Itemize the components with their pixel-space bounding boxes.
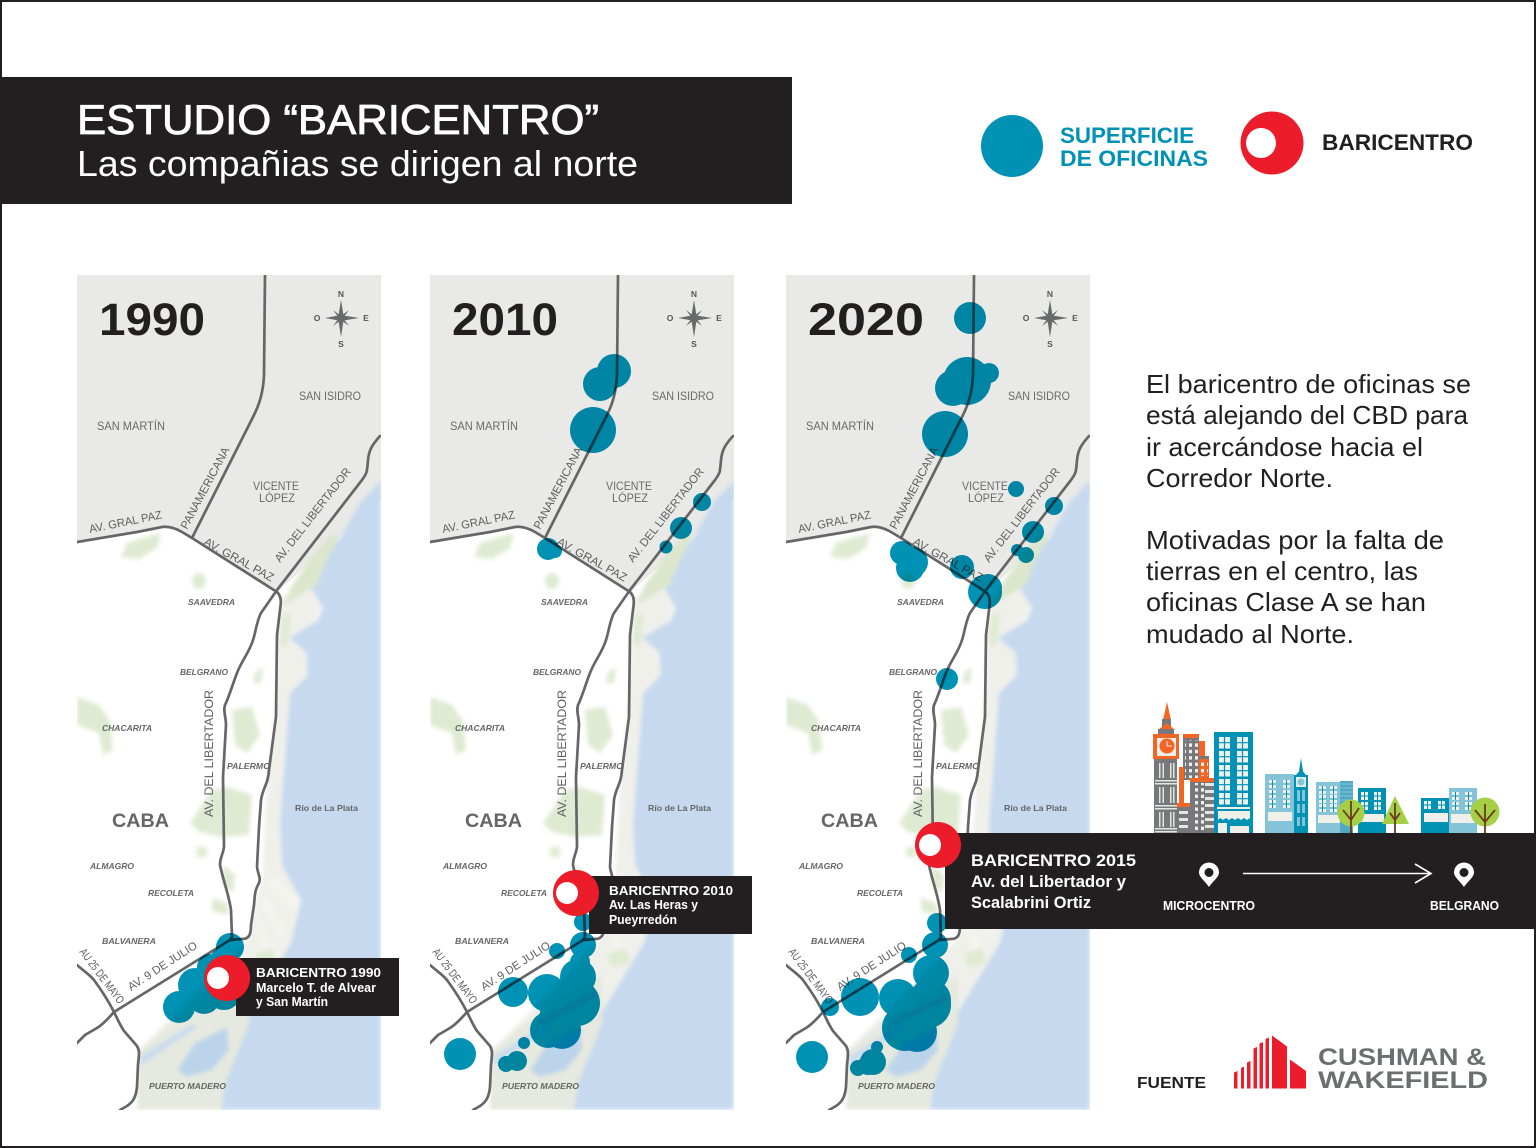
map labels 2020: CHACARITA	[811, 723, 861, 733]
map labels 2010: CABA	[465, 810, 522, 832]
panel: map 2010	[430, 275, 752, 1110]
office bubbles 1990	[163, 933, 244, 1023]
map labels 2010: PANAMERICANA	[532, 445, 586, 531]
map labels 2010: AV. GRAL PAZ	[441, 509, 516, 536]
callout: baricentro 2015: BARICENTRO 2015	[971, 851, 1136, 870]
compass 2010	[667, 289, 722, 349]
map labels 2010: SAN ISIDRO	[652, 389, 714, 403]
text block: explanation	[1146, 369, 1471, 649]
map labels 1990: ALMAGRO	[89, 861, 134, 871]
map labels 2010: PUERTO MADERO	[502, 1081, 579, 1091]
map labels 2020: AU 25 DE MAYO	[786, 947, 835, 1007]
map labels 2010	[430, 294, 714, 1091]
map labels 2020: RECOLETA	[857, 888, 903, 898]
map labels 1990: CABA	[112, 810, 169, 832]
text block: explanation: Motivadas por la falta de	[1146, 525, 1444, 555]
callout: baricentro 2010: Pueyrredón	[609, 912, 677, 927]
map labels 2010: PALERMO	[580, 761, 623, 771]
map labels 2020: AV. DEL LIBERTADOR	[982, 466, 1063, 565]
callout: baricentro 1990: Marcelo T. de Alvear	[256, 980, 376, 995]
mid buildings and trees	[1316, 781, 1409, 833]
map labels 2010: CHACARITA	[455, 723, 505, 733]
map labels 1990	[77, 294, 361, 1091]
gray and orange buildings	[1177, 734, 1214, 833]
text block: explanation: Corredor Norte.	[1146, 463, 1333, 493]
icon: pin microcentro	[1163, 862, 1255, 913]
map labels 1990: AV. DEL LIBERTADOR	[273, 466, 354, 565]
icon: city skyline	[1153, 702, 1500, 833]
icon: pin belgrano: BELGRANO	[1430, 899, 1499, 913]
office bubbles 2010	[444, 354, 711, 1072]
map labels 1990: BELGRANO	[180, 667, 228, 677]
callout: baricentro 2010: Av. Las Heras y	[609, 897, 699, 912]
callout: baricentro 2015: Scalabrini Ortiz	[971, 893, 1091, 912]
map labels 2020: AV. DEL LIBERTADOR	[913, 690, 925, 817]
map labels 1990: VICENTE	[253, 479, 299, 493]
callout: baricentro 1990	[204, 955, 399, 1016]
compass 2020	[1023, 289, 1078, 349]
callout: baricentro 2015	[915, 822, 1534, 929]
map labels 1990: PANAMERICANA	[179, 445, 233, 531]
legend: baricentro	[1240, 112, 1473, 174]
map labels 1990: PUERTO MADERO	[149, 1081, 226, 1091]
map labels 2010: SAN MARTÍN	[450, 418, 518, 433]
text block: explanation: mudado al Norte.	[1146, 619, 1354, 649]
map labels 2010: AV. GRAL PAZ	[555, 536, 629, 584]
compass 1990: N	[338, 289, 344, 299]
map labels 1990: LÓPEZ	[259, 490, 295, 505]
icon: pin microcentro: MICROCENTRO	[1163, 899, 1255, 913]
title: ESTUDIO “BARICENTRO”	[77, 96, 599, 143]
map labels 2020: LÓPEZ	[968, 490, 1004, 505]
map labels 2010: Río de La Plata	[648, 803, 711, 813]
logo: cushman and wakefield: CUSHMAN &	[1318, 1044, 1486, 1071]
map labels 2010: BALVANERA	[455, 936, 509, 946]
map labels 2010: AV. DEL LIBERTADOR	[557, 690, 569, 817]
callout: baricentro 1990: BARICENTRO 1990	[256, 965, 381, 980]
source label: FUENTE	[1137, 1075, 1206, 1092]
callout: baricentro 2010: BARICENTRO 2010	[609, 883, 733, 898]
map labels 2010: SAAVEDRA	[541, 597, 588, 607]
compass 1990: O	[314, 313, 321, 323]
compass 2020: O	[1023, 313, 1030, 323]
map labels 2020: Río de La Plata	[1004, 803, 1067, 813]
callout: baricentro 2015: Av. del Libertador y	[971, 872, 1127, 891]
legend: superficie de oficinas	[981, 115, 1208, 177]
compass 2020: N	[1047, 289, 1053, 299]
big clock tower	[1153, 702, 1179, 833]
compass 1990: S	[338, 339, 344, 349]
callout: baricentro 2010	[553, 870, 752, 934]
callout: baricentro 1990: y San Martín	[256, 994, 328, 1009]
text block: explanation: ir acercándose hacia el	[1146, 432, 1423, 462]
legend: superficie de oficinas: SUPERFICIE	[1060, 123, 1194, 148]
map labels 2010: BELGRANO	[533, 667, 581, 677]
title banner	[2, 77, 792, 204]
compass 2010: S	[691, 339, 697, 349]
map labels 2020: BALVANERA	[811, 936, 865, 946]
office bubbles 2020	[796, 302, 1063, 1076]
map labels 1990: AU 25 DE MAYO	[77, 947, 126, 1007]
map labels 1990: SAAVEDRA	[188, 597, 235, 607]
map labels 1990: RECOLETA	[148, 888, 194, 898]
compass 2010: E	[716, 313, 722, 323]
subtitle: Las compañias se dirigen al norte	[77, 143, 638, 184]
map labels 2020: PALERMO	[936, 761, 979, 771]
map labels 2010: 2010	[452, 294, 558, 345]
compass 2020: S	[1047, 339, 1053, 349]
map labels 2010: AV. DEL LIBERTADOR	[626, 466, 707, 565]
map labels 2010: LÓPEZ	[612, 490, 648, 505]
map labels 1990: Río de La Plata	[295, 803, 358, 813]
map labels 1990: BALVANERA	[102, 936, 156, 946]
map labels 2020: AV. 9 DE JULIO	[835, 940, 909, 994]
right buildings and tree	[1421, 788, 1500, 833]
map labels 2020: SAN ISIDRO	[1008, 389, 1070, 403]
map labels 2010: RECOLETA	[501, 888, 547, 898]
dark band over bubbles 2010	[540, 993, 597, 1023]
legend: baricentro: BARICENTRO	[1322, 130, 1473, 155]
map labels 2020: PANAMERICANA	[888, 445, 942, 531]
compass 1990: E	[363, 313, 369, 323]
map labels 2020: CABA	[821, 810, 878, 832]
map labels 2010: VICENTE	[606, 479, 652, 493]
map labels 1990: AV. GRAL PAZ	[202, 536, 276, 584]
legend: superficie de oficinas: DE OFICINAS	[1060, 146, 1208, 171]
map labels 2020: 2020	[808, 294, 924, 345]
text block: explanation: El baricentro de oficinas se	[1146, 369, 1471, 399]
map labels 1990: AV. DEL LIBERTADOR	[204, 690, 216, 817]
light blue building and small tower	[1265, 758, 1308, 833]
compass 2020: E	[1072, 313, 1078, 323]
icon: pin belgrano	[1430, 862, 1499, 913]
text block: explanation: oficinas Clase A se han	[1146, 587, 1426, 617]
compass 2010: O	[667, 313, 674, 323]
arrow: microcentro to belgrano	[1243, 864, 1431, 883]
map labels 2020: AV. GRAL PAZ	[797, 509, 872, 536]
panel: map 1990	[77, 275, 399, 1110]
compass 2010: N	[691, 289, 697, 299]
map labels 2020: PUERTO MADERO	[858, 1081, 935, 1091]
logo: cushman and wakefield	[1234, 1036, 1488, 1094]
map labels 2010: AU 25 DE MAYO	[430, 947, 479, 1007]
map labels 2020: VICENTE	[962, 479, 1008, 493]
map labels 2020: ALMAGRO	[798, 861, 843, 871]
dark band over bubbles 2020	[892, 997, 948, 1023]
map labels 2010: AV. 9 DE JULIO	[479, 940, 553, 994]
map labels 1990: AV. GRAL PAZ	[88, 509, 163, 536]
map labels 2010: ALMAGRO	[442, 861, 487, 871]
compass 1990	[314, 289, 369, 349]
text block: explanation: está alejando del CBD para	[1146, 400, 1469, 430]
map labels 2020: BELGRANO	[889, 667, 937, 677]
text block: explanation: tierras en el centro, las	[1146, 556, 1418, 586]
map labels 1990: AV. 9 DE JULIO	[126, 940, 200, 994]
panel: map 2020	[786, 275, 1090, 1110]
map labels 1990: PALERMO	[227, 761, 270, 771]
tall blue building	[1214, 732, 1253, 833]
map labels 2020: AV. GRAL PAZ	[911, 536, 985, 584]
logo: cushman and wakefield: WAKEFIELD	[1318, 1067, 1488, 1094]
map labels 1990: SAN MARTÍN	[97, 418, 165, 433]
map labels 1990: 1990	[99, 294, 205, 345]
map labels 2020: SAN MARTÍN	[806, 418, 874, 433]
map labels 2020: SAAVEDRA	[897, 597, 944, 607]
map labels 1990: SAN ISIDRO	[299, 389, 361, 403]
map labels 1990: CHACARITA	[102, 723, 152, 733]
map labels 2020	[786, 294, 1070, 1091]
